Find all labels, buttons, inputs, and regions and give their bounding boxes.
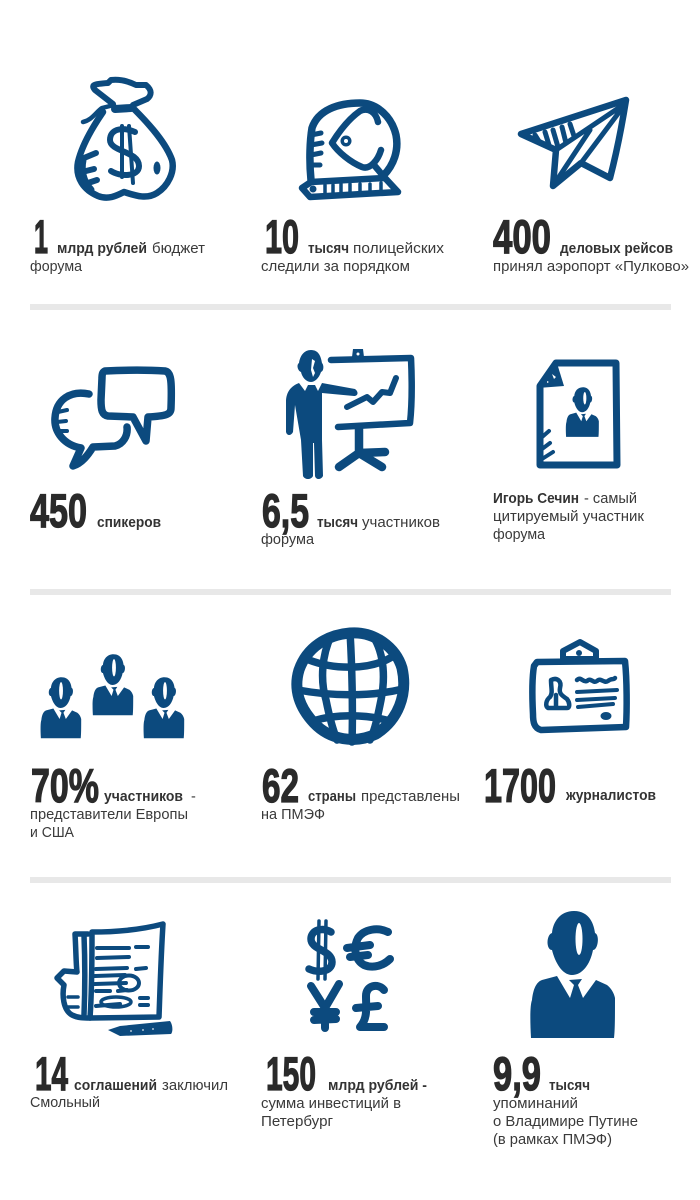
stat: 6.5 thousand participants: участников xyxy=(362,515,440,531)
stat: 150 billion roubles: Петербург xyxy=(261,1114,333,1130)
stat: 150 billion roubles: 150 xyxy=(266,1048,316,1101)
stat: 1 billion roubles: форума xyxy=(30,259,83,275)
icon: currency symbols xyxy=(309,921,390,1028)
stat: 150 billion roubles: млрд рублей - xyxy=(328,1078,427,1094)
icon: globe xyxy=(297,632,404,742)
stat: 10 thousand police: полицейских xyxy=(353,241,445,257)
stat: 10 thousand police xyxy=(261,211,445,275)
stat: 400 flights: деловых рейсов xyxy=(560,241,673,257)
stat: 1 billion roubles xyxy=(30,211,205,275)
stat: 6.5 thousand participants: тысяч xyxy=(317,515,358,531)
stat: 70 percent: участников xyxy=(104,789,183,805)
stat: 62 countries: на ПМЭФ xyxy=(261,807,325,823)
stat: 62 countries: 62 xyxy=(262,760,299,813)
stat: 9.9 thousand mentions: упоминаний xyxy=(493,1096,578,1112)
stat: 9.9 thousand mentions: о Владимире Путине xyxy=(493,1114,638,1130)
stat: 70 percent: представители Европы xyxy=(30,807,188,823)
stat: 10 thousand police: 10 xyxy=(265,211,299,264)
stat: 10 thousand police: следили за порядком xyxy=(261,259,410,275)
icon: newspaper and pencil xyxy=(57,924,172,1036)
icon: money bag xyxy=(77,80,173,198)
icon: document with portrait xyxy=(538,360,617,465)
stat: 450 speakers xyxy=(30,485,161,538)
stat: 400 flights: 400 xyxy=(493,211,551,264)
stat: Igor Sechin xyxy=(493,491,645,543)
stat: 70 percent xyxy=(30,760,196,841)
stat: 6.5 thousand participants: форума xyxy=(261,532,315,548)
stat: 1 billion roubles: 1 xyxy=(34,211,48,264)
icon: man in suit xyxy=(530,911,615,1038)
stat: 10 thousand police: тысяч xyxy=(308,241,349,257)
stat: Igor Sechin: форума xyxy=(493,527,546,543)
stat: 70 percent: и США xyxy=(30,825,74,841)
icon: police helmet xyxy=(302,103,398,197)
stat: Igor Sechin: - самый xyxy=(584,491,637,507)
stat: 150 billion roubles: сумма инвестиций в xyxy=(261,1096,401,1112)
stat: Igor Sechin: Игорь Сечин xyxy=(493,491,579,507)
stat: 9.9 thousand mentions: тысяч xyxy=(549,1078,590,1094)
icon: presenter at chart board xyxy=(286,349,412,479)
stat: 14 agreements: заключил xyxy=(162,1078,228,1094)
stat: 70 percent: 70% xyxy=(31,760,99,813)
stat: 1700 journalists: 1700 xyxy=(484,760,556,813)
stat: 400 flights: принял аэропорт «Пулково» xyxy=(493,259,689,275)
icon: three delegates xyxy=(41,654,184,738)
stat: Igor Sechin: цитируемый участник xyxy=(493,509,645,525)
stat: 150 billion roubles xyxy=(261,1048,427,1130)
stat: 400 flights xyxy=(493,211,689,275)
stat: 450 speakers: 450 xyxy=(30,485,87,538)
stat: 9.9 thousand mentions: 9,9 xyxy=(493,1048,541,1101)
stat: 14 agreements: 14 xyxy=(35,1048,68,1101)
stat: 14 agreements: Смольный xyxy=(30,1095,100,1111)
stat: 62 countries xyxy=(261,760,460,823)
stat: 62 countries: страны xyxy=(308,789,356,805)
stat: 1 billion roubles: млрд рублей xyxy=(57,241,147,257)
icon: paper plane xyxy=(521,100,626,186)
icon: speech bubbles xyxy=(55,370,171,466)
stat: 1700 journalists xyxy=(484,760,656,813)
stat: 6.5 thousand participants: 6,5 xyxy=(262,485,309,538)
icon: press badge xyxy=(532,642,627,730)
stat: 14 agreements xyxy=(30,1048,228,1111)
stat: 70 percent: - xyxy=(191,789,196,805)
stat: 1 billion roubles: бюджет xyxy=(152,241,205,257)
stat: 62 countries: представлены xyxy=(361,789,460,805)
stat: 450 speakers: спикеров xyxy=(97,515,161,531)
stat: 14 agreements: соглашений xyxy=(74,1078,157,1094)
stat: 6.5 thousand participants xyxy=(261,485,440,548)
stat: 9.9 thousand mentions xyxy=(493,1048,638,1148)
stat: 1700 journalists: журналистов xyxy=(565,788,656,804)
stat: 9.9 thousand mentions: (в рамках ПМЭФ) xyxy=(493,1132,612,1148)
